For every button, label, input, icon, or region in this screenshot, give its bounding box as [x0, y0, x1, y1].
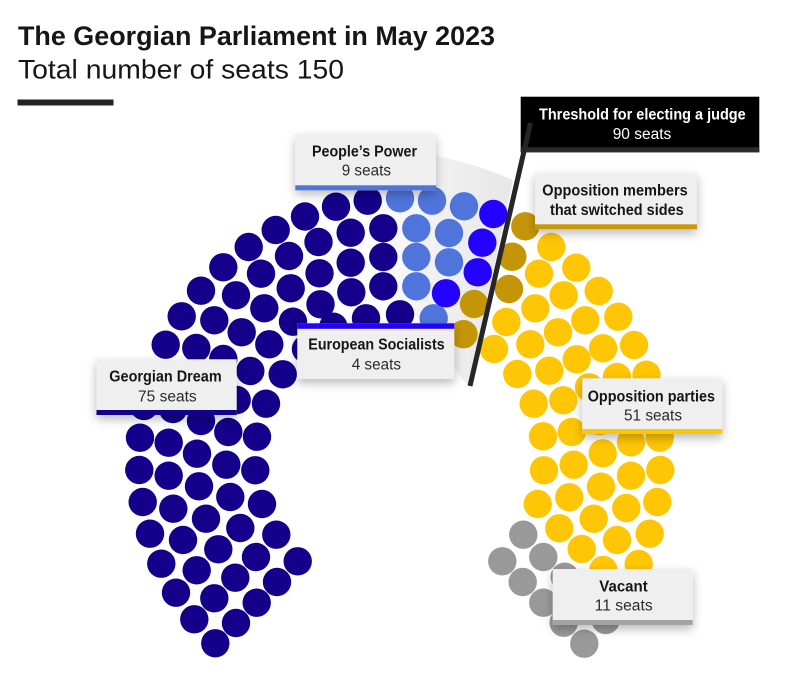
seat chart — [125, 184, 675, 658]
label: Georgian Dream: Georgian Dream — [109, 369, 222, 386]
label: opposition members that switched sides: that switched sides — [550, 202, 684, 219]
label: vacant — [553, 569, 693, 625]
label: opposition members that switched sides: Opposition members — [542, 183, 688, 200]
label: vacant: 11 seats — [595, 598, 653, 615]
label: threshold: Threshold for electing a judge — [539, 106, 746, 123]
threshold wedge background — [370, 150, 513, 386]
label: opposition parties — [582, 378, 722, 434]
seats: People's Power — [386, 184, 478, 332]
label: opposition members that switched sides — [535, 173, 697, 229]
label: People's Power: 9 seats — [342, 163, 391, 180]
seats: opposition members that switched sides — [449, 212, 540, 348]
title block — [18, 21, 495, 106]
label: opposition parties: 51 seats — [624, 408, 682, 425]
label: threshold: 90 seats — [613, 126, 672, 143]
seats: European Socialists — [432, 200, 507, 307]
label: vacant: Vacant — [599, 578, 648, 595]
label: Georgian Dream — [96, 359, 237, 415]
label: opposition parties: Opposition parties — [588, 388, 715, 405]
threshold line — [470, 123, 530, 386]
label: threshold — [521, 97, 759, 152]
label: European Socialists: 4 seats — [352, 356, 401, 373]
label: Georgian Dream: 75 seats — [138, 389, 197, 406]
label: European Socialists: European Socialists — [308, 337, 445, 354]
label: European Socialists — [297, 323, 454, 379]
seats: vacant — [488, 520, 620, 658]
title: The Georgian Parliament in May 2023 — [18, 21, 495, 51]
label: People's Power: People’s Power — [312, 144, 417, 161]
subtitle: Total number of seats 150 — [18, 54, 344, 84]
title rule — [18, 100, 114, 106]
seats: opposition parties — [480, 233, 674, 612]
label: People's Power — [295, 134, 436, 190]
seats: Georgian Dream — [125, 186, 414, 658]
